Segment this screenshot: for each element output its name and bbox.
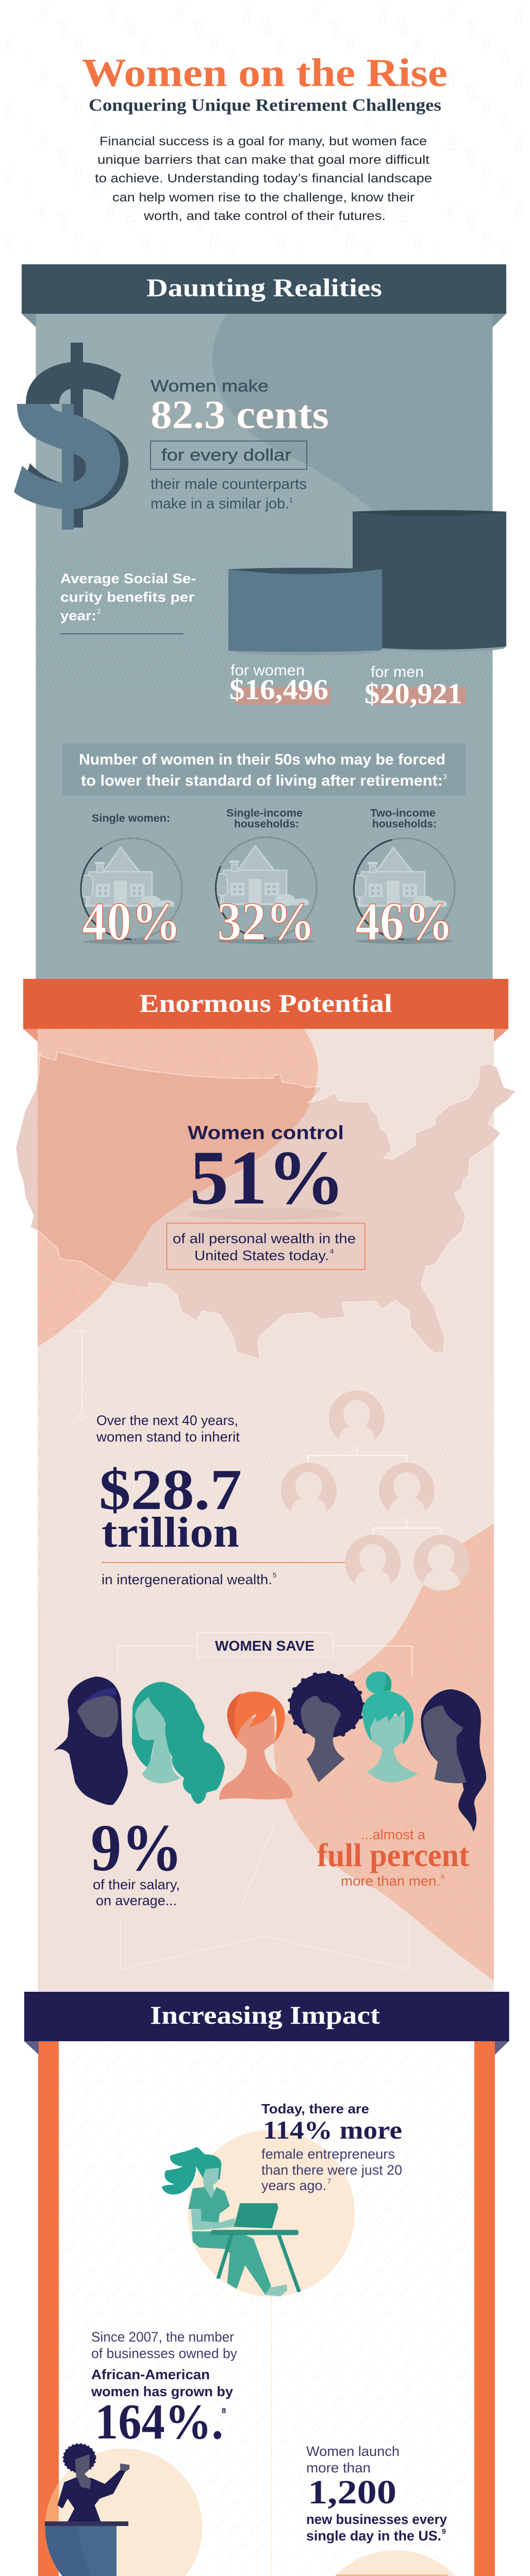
stat: 9% of salary: on average... — [96, 1893, 177, 1908]
stat: 9% of salary: 9% — [91, 1811, 183, 1885]
section banner: increasing impact: Increasing Impact — [150, 2001, 380, 2029]
intro paragraph: can help women rise to the challenge, know their — [112, 191, 415, 205]
stat: two-income households 46%: 46% — [355, 891, 453, 952]
stat: 1,200 new businesses: single day in the US. — [306, 2528, 441, 2544]
heading: average social security benefits: curity benefits per — [60, 589, 195, 605]
stat: $28.7 trillion: trillion — [102, 1509, 239, 1556]
stat: 82.3 cents: their male counterparts — [151, 476, 307, 493]
label: women save: WOMEN SAVE — [215, 1638, 314, 1654]
stat: $28.7 trillion: women stand to inherit — [96, 1429, 240, 1445]
callout: women in their 50s: Number of women in their 50s who may be forced — [79, 751, 445, 768]
stat: 164% African-American: African-American — [91, 2367, 210, 2382]
stat: 114% more: female entrepreneurs — [261, 2146, 395, 2162]
stat: full percent: more than men. — [341, 1873, 440, 1889]
heading: average social security benefits: 2 — [97, 607, 101, 615]
heading: average social security benefits: year: — [60, 608, 96, 623]
stat: single women 40% — [81, 812, 182, 952]
label: women save — [118, 1633, 412, 1676]
illustration: woman at desk — [161, 2147, 299, 2296]
callout: women in their 50s: 3 — [443, 772, 447, 781]
section banner: enormous potential — [23, 979, 508, 1029]
stat: single-income households 32%: Single-income — [226, 807, 303, 819]
stat: single-income households 32% — [216, 807, 317, 952]
orange side bars — [38, 2041, 495, 2576]
section banner: enormous potential: Enormous Potential — [139, 989, 392, 1018]
stat: 82.3 cents — [151, 377, 329, 512]
icon: dollar sign — [14, 343, 128, 530]
stat: 164% African-American — [91, 2329, 237, 2450]
heading: average social security benefits — [60, 571, 196, 634]
stat: 82.3 cents: 82.3 cents — [151, 392, 329, 437]
label: men benefit — [365, 664, 466, 710]
stat: 1,200 new businesses: 1,200 — [308, 2473, 396, 2511]
bar chart: social security benefits — [228, 510, 506, 655]
stat: $28.7 trillion: Over the next 40 years, — [96, 1413, 238, 1428]
stat: $28.7 trillion: in intergenerational wealth. — [102, 1572, 272, 1587]
intro paragraph — [95, 134, 432, 223]
stat: 114% more: Today, there are — [261, 2101, 369, 2116]
stat: 1,200 new businesses: more than — [306, 2460, 371, 2476]
illustration: speaker at podium — [45, 2444, 202, 2576]
stat: 164% African-American: Since 2007, the number — [91, 2329, 234, 2345]
stat: 82.3 cents: 1 — [289, 496, 293, 504]
section banner: daunting realities: Daunting Realities — [146, 273, 382, 302]
stat: $28.7 trillion: 5 — [273, 1571, 276, 1579]
stat: women control 51% — [167, 1122, 365, 1269]
connector line — [74, 1331, 89, 1420]
stat: 82.3 cents: make in a similar job. — [151, 496, 289, 512]
stat: full percent: ...almost a — [361, 1827, 426, 1842]
stat: 114% more — [261, 2101, 402, 2193]
subtitle: Conquering Unique Retirement Challenges — [89, 96, 441, 115]
stat: women control 51%: United States today. — [194, 1248, 329, 1263]
stat: full percent: full percent — [317, 1837, 470, 1873]
stat: 1,200 new businesses — [306, 2444, 447, 2544]
background blob — [38, 1029, 318, 1347]
stat: women control 51%: 51% — [190, 1135, 345, 1221]
woman 2 — [132, 1682, 225, 1804]
stat: women control 51%: of all personal wealth in the — [173, 1231, 356, 1246]
illustration: woman with mug — [335, 2550, 456, 2576]
background blob with piggy pattern — [273, 1523, 494, 1981]
intro paragraph: Financial success is a goal for many, but women face — [100, 134, 427, 148]
panel: increasing impact — [24, 1992, 509, 2576]
label: women benefit — [229, 662, 330, 706]
stat: $28.7 trillion: $28.7 — [99, 1458, 242, 1522]
circle: entrepreneur backdrop — [188, 2130, 355, 2297]
title: Women on the Rise — [82, 50, 448, 95]
stat: 114% more: 7 — [327, 2177, 331, 2185]
section banner: daunting realities — [22, 264, 506, 314]
map: United States — [16, 1029, 516, 1360]
callout: women in their 50s — [62, 743, 466, 795]
hatched band — [38, 1378, 494, 1603]
label: men benefit: for men — [371, 664, 424, 681]
stat: 164% African-American: women has grown by — [91, 2384, 233, 2399]
stat: $28.7 trillion — [96, 1413, 345, 1587]
stat: women control 51%: Women control — [188, 1122, 344, 1143]
stat: two-income households 46%: households: — [372, 818, 437, 830]
family tree icon — [281, 1391, 469, 1590]
woman 1 — [54, 1676, 128, 1805]
stat: 1,200 new businesses: 9 — [442, 2527, 446, 2535]
woman 6 — [421, 1689, 486, 1832]
stat: 1,200 new businesses: Women launch — [306, 2444, 400, 2459]
illustration: six women — [54, 1671, 486, 1832]
intro paragraph: unique barriers that can make that goal more difficult — [97, 153, 429, 167]
stat: 164% African-American: 164%. — [95, 2394, 223, 2450]
section banner: increasing impact — [24, 1992, 509, 2041]
woman 5 — [362, 1671, 419, 1783]
heading: average social security benefits: Average Social Se- — [60, 571, 196, 586]
stat: 114% more: years ago. — [261, 2178, 326, 2193]
intro paragraph: worth, and take control of their futures. — [143, 209, 386, 223]
callout: women in their 50s: to lower their standard of living after retirement: — [81, 772, 443, 789]
stat: single women 40%: Single women: — [92, 812, 170, 824]
stat: 164% African-American: of businesses owned by — [91, 2346, 237, 2361]
stat: full percent: 6 — [441, 1873, 444, 1880]
stat: 114% more: than there were just 20 — [261, 2162, 402, 2178]
label: women benefit: for women — [230, 662, 305, 679]
stat: two-income households 46% — [354, 807, 455, 952]
stat: single-income households 32%: households: — [234, 818, 299, 830]
stat: single-income households 32%: 32% — [217, 891, 315, 952]
panel: daunting realities — [14, 264, 506, 979]
label: women benefit: $16,496 — [229, 674, 328, 706]
stat: 9% of salary: of their salary, — [93, 1877, 180, 1892]
label: men benefit: $20,921 — [365, 678, 462, 710]
stat: single women 40%: 40% — [82, 891, 181, 952]
panel: enormous potential — [16, 979, 516, 1991]
stat: two-income households 46%: Two-income — [370, 807, 436, 819]
stat: women control 51%: 4 — [330, 1247, 334, 1255]
intro paragraph: to achieve. Understanding today’s financial landscape — [95, 172, 432, 185]
stat: 82.3 cents: Women make — [151, 377, 269, 395]
woman 3 — [219, 1691, 293, 1800]
stat: full percent — [317, 1827, 470, 1889]
stat: 164% African-American: 8 — [222, 2406, 226, 2415]
stat: 114% more: 114% more — [263, 2115, 402, 2144]
woman 4 — [290, 1673, 363, 1783]
stat: 1,200 new businesses: new businesses every — [306, 2512, 447, 2527]
stat: 82.3 cents: for every dollar — [161, 446, 291, 464]
